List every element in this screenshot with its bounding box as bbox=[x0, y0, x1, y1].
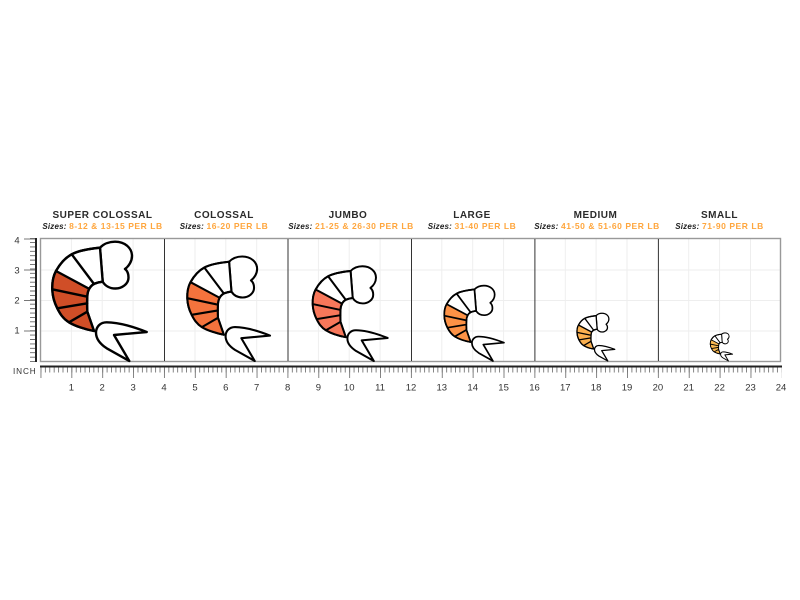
column: colossal: Sizes: 16-20 PER LB bbox=[180, 221, 268, 231]
bottom ruler: 7 bbox=[254, 382, 259, 394]
bottom ruler: 21 bbox=[683, 382, 694, 394]
left ruler bbox=[14, 236, 36, 362]
bottom ruler: 13 bbox=[437, 382, 447, 394]
column: jumbo: JUMBO bbox=[329, 210, 367, 221]
bottom ruler: 3 bbox=[130, 382, 136, 394]
column: jumbo bbox=[288, 210, 414, 361]
left ruler: 3 bbox=[14, 266, 20, 276]
bottom ruler: 18 bbox=[591, 382, 601, 394]
bottom ruler: 22 bbox=[714, 382, 725, 394]
bottom ruler: 15 bbox=[498, 382, 509, 394]
column: small: Sizes: 71-90 PER LB bbox=[675, 221, 764, 231]
bottom ruler: 9 bbox=[316, 382, 321, 394]
bottom ruler: 10 bbox=[344, 382, 354, 394]
bottom ruler: 16 bbox=[529, 382, 540, 394]
column: super colossal bbox=[42, 210, 163, 361]
bottom ruler: INCH bbox=[13, 367, 37, 376]
bottom ruler: 12 bbox=[406, 382, 416, 394]
bottom ruler: 24 bbox=[776, 382, 786, 394]
column: small: SMALL bbox=[701, 210, 738, 221]
column: colossal: COLOSSAL bbox=[194, 210, 254, 221]
column: large: LARGE bbox=[453, 210, 491, 221]
left ruler: 4 bbox=[14, 236, 20, 246]
bottom ruler: 23 bbox=[745, 382, 756, 394]
column: large bbox=[428, 210, 516, 361]
bottom ruler: 6 bbox=[223, 382, 228, 394]
left ruler: 1 bbox=[14, 326, 20, 336]
bottom ruler: 14 bbox=[467, 382, 478, 394]
column: super colossal: Sizes: 8-12 & 13-15 PER LB bbox=[42, 221, 163, 231]
bottom ruler: 20 bbox=[653, 382, 663, 394]
bottom ruler: 19 bbox=[622, 382, 632, 394]
chart frame bbox=[40, 238, 781, 362]
bottom ruler: 11 bbox=[375, 382, 385, 394]
bottom ruler: 8 bbox=[285, 382, 290, 394]
column: medium: MEDIUM bbox=[574, 210, 617, 221]
column: jumbo: Sizes: 21-25 & 26-30 PER LB bbox=[288, 221, 414, 231]
bottom ruler: 1 bbox=[69, 382, 74, 394]
column: small bbox=[675, 210, 764, 361]
column: large: Sizes: 31-40 PER LB bbox=[428, 221, 516, 231]
left ruler: 2 bbox=[14, 296, 20, 306]
column: super colossal: SUPER COLOSSAL bbox=[52, 210, 153, 221]
column: medium: Sizes: 41-50 & 51-60 PER LB bbox=[534, 221, 660, 231]
bottom ruler bbox=[13, 366, 786, 394]
bottom ruler: 4 bbox=[161, 382, 167, 394]
bottom ruler: 17 bbox=[560, 382, 571, 394]
bottom ruler: 5 bbox=[192, 382, 198, 394]
column: colossal bbox=[180, 210, 270, 361]
column: medium bbox=[534, 210, 660, 361]
bottom ruler: 2 bbox=[100, 382, 105, 394]
